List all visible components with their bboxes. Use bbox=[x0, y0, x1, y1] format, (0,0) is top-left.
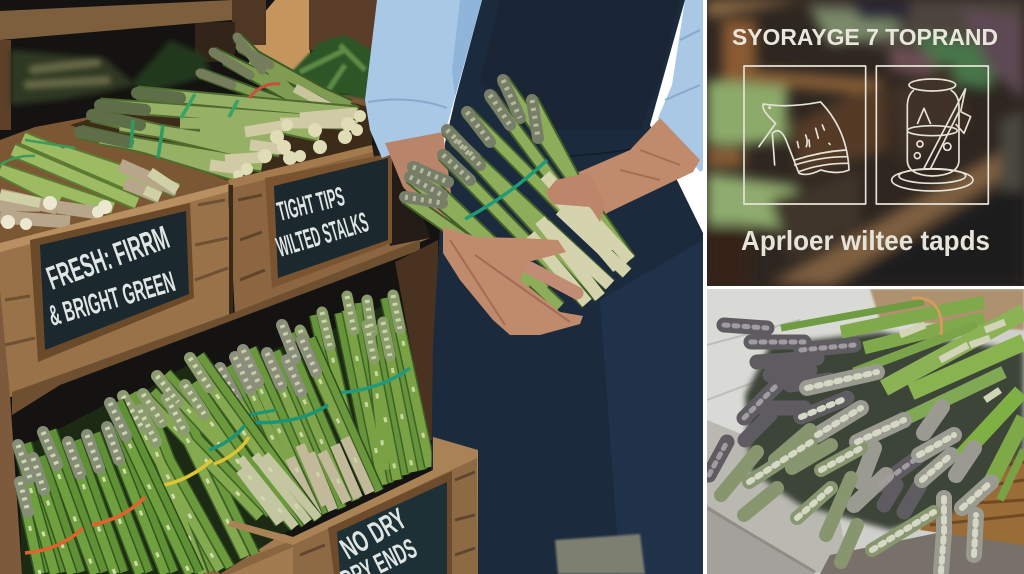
left post bbox=[0, 290, 22, 574]
man's right fingers over bunch bbox=[546, 172, 605, 222]
crate: upper right bbox=[228, 145, 430, 318]
asparagus bundle: upper crate tall tips bbox=[200, 37, 358, 125]
background: warm wall bbox=[254, 0, 310, 70]
floor gap between legs bbox=[555, 534, 645, 574]
sign text: FRESH: FIRRM bbox=[42, 218, 174, 297]
sign: fresh bbox=[30, 203, 194, 362]
heading: SYORAYGE 7 TOPRAND bbox=[732, 24, 998, 50]
background: leafy greens bbox=[292, 34, 371, 101]
asparagus bundle: lower-left crate bbox=[0, 138, 177, 230]
sign: no dry ends bbox=[328, 471, 452, 574]
shirt: left sleeve bbox=[365, 0, 482, 158]
blurred market background bbox=[707, 0, 1024, 286]
apron bbox=[430, 0, 703, 574]
panel: market stall with crates bbox=[0, 0, 440, 574]
asparagus bundle: right teal band bbox=[292, 295, 430, 488]
right post bbox=[395, 240, 440, 440]
green stalks bbox=[781, 298, 1024, 500]
rubber bands bbox=[131, 120, 163, 158]
sign: tight tips: WILTED STALKS bbox=[273, 206, 372, 263]
background: wooden posts bbox=[0, 0, 390, 130]
shirt: right sleeve bbox=[658, 0, 703, 172]
panel: man holding asparagus bbox=[365, 0, 703, 574]
man's right forearm bbox=[578, 118, 700, 214]
background: dim produce on rear shelf bbox=[10, 40, 210, 105]
caption: Aprloer wiltee tapds bbox=[741, 225, 990, 256]
asparagus bunch in hands bbox=[405, 80, 630, 307]
panel: storage tips bbox=[707, 0, 1024, 286]
sign text: NO DRY bbox=[335, 502, 412, 566]
sign: fresh: & BRIGHT GREEN bbox=[45, 266, 179, 333]
asparagus bundle: orange bands bbox=[18, 401, 199, 574]
asparagus bundle: upper crate horizontal bbox=[80, 84, 366, 180]
lower shelf beam bbox=[12, 240, 420, 415]
asparagus bundle: yellow band bbox=[123, 355, 318, 574]
asparagus bundle: teal band pale ends bbox=[220, 325, 379, 515]
crate interiors bbox=[0, 102, 372, 243]
shadow mass under heads bbox=[745, 332, 1024, 530]
crate: left with sign bbox=[0, 184, 233, 398]
background: upper wooden shelf bbox=[0, 0, 232, 40]
lower-left crate bbox=[205, 534, 293, 574]
sign: tight tips bbox=[265, 153, 392, 288]
orange tie bbox=[912, 298, 941, 335]
man's left forearm bbox=[385, 132, 452, 221]
panel: asparagus on wooden table bbox=[707, 289, 1024, 574]
icon box: towel-wrapped bundle bbox=[744, 66, 866, 204]
man's left hand over bunch bbox=[443, 227, 583, 335]
asparagus heads bbox=[709, 325, 991, 572]
table planks bbox=[707, 289, 1024, 574]
basket bbox=[870, 289, 1024, 545]
sign: tight tips: TIGHT TIPS bbox=[274, 181, 347, 227]
crate: bottom right with sign bbox=[228, 437, 478, 574]
stalk cut ends bbox=[233, 110, 366, 180]
icon box: jar with water bbox=[876, 66, 988, 204]
